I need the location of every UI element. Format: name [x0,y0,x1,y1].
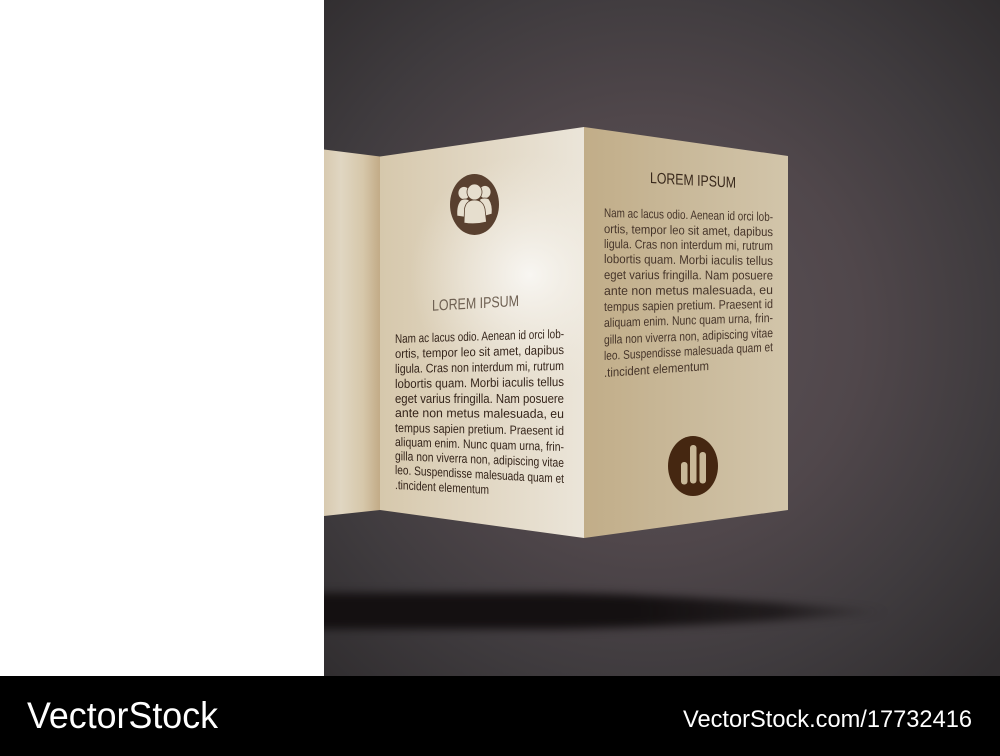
text block: middle page: ortis, tempor leo sit amet, dapibus [395,343,564,361]
text block: right page: leo. Suspendisse malesuada quam et [604,340,773,363]
text block: middle page: ante non metus malesuada, eu [395,406,564,421]
text block: right page: ante non metus malesuada, eu [604,283,773,298]
text block: right page: lobortis quam. Morbi iaculis tellus [604,252,773,268]
text block: right page: tempus sapien pretium. Praesent id [604,297,773,314]
text block: right page [604,206,773,380]
text block: right page: ligula. Cras non interdum mi, rutrum [604,237,773,253]
text block: middle page: .tincident elementum [395,478,489,497]
text block: middle page: gilla non viverra non, adipiscing vitae [395,449,564,470]
text block: middle page: aliquam enim. Nunc quam urna, frin- [395,435,564,454]
text block: middle page: Nam ac lacus odio. Aenean id orci lob- [395,327,564,346]
panel: left fold strip [324,150,380,516]
heading: middle page: LOREM IPSUM [432,293,519,315]
text block: middle page: leo. Suspendisse malesuada quam et [395,463,564,486]
text block: middle page: tempus sapien pretium. Praesent id [395,421,564,438]
text block: middle page: ligula. Cras non interdum mi, rutrum [395,359,564,376]
footer logo: VectorStock: VectorStock [27,695,218,736]
white left panel [0,0,324,676]
dark background [324,0,1000,676]
text block: middle page: lobortis quam. Morbi iaculis tellus [395,375,564,391]
text block: middle page: eget varius fringilla. Nam posuere [395,392,564,406]
panel: right page [584,127,788,538]
floor shadow [260,593,890,629]
text block: right page: gilla non viverra non, adipiscing vitae [604,326,773,347]
text block: right page: .tincident elementum [604,359,709,380]
heading: right page: LOREM IPSUM [650,170,736,192]
text block: right page: ortis, tempor leo sit amet, dapibus [604,222,773,239]
panel: middle page [380,127,584,538]
footer bar [0,676,1000,756]
text block: right page: eget varius fringilla. Nam posuere [604,268,773,283]
icon: bar chart [668,436,718,496]
text block: right page: Nam ac lacus odio. Aenean id orci lob- [604,206,773,224]
text block: right page: aliquam enim. Nunc quam urna, frin- [604,311,773,330]
brochure [324,127,788,538]
footer reference URL: VectorStock.com/17732416 [683,706,972,733]
text block: middle page [395,327,564,497]
icon: people [450,174,499,235]
